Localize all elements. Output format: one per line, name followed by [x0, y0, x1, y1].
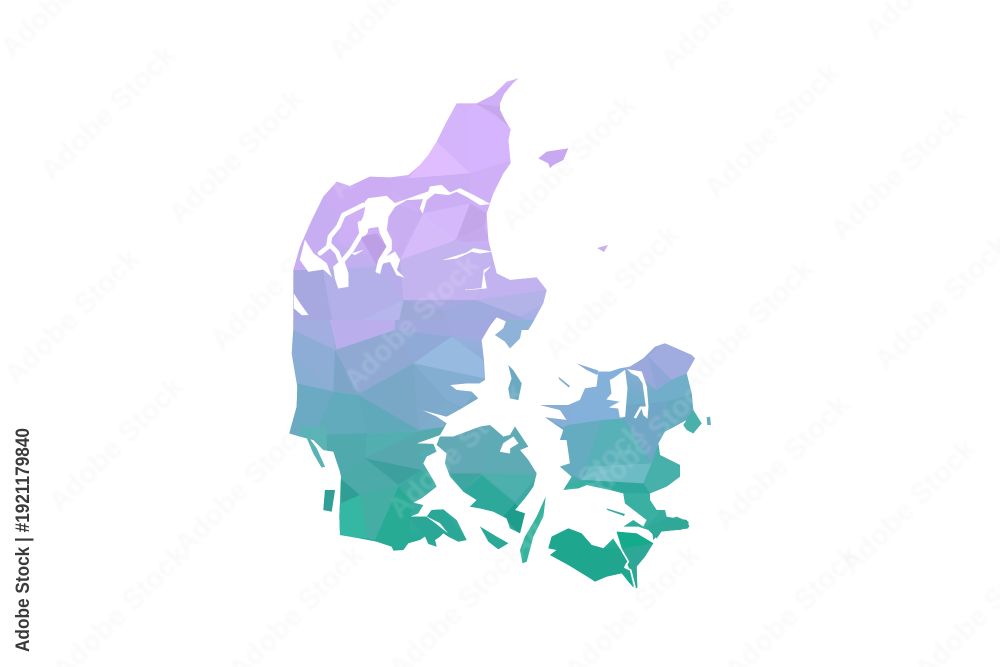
watermark: repeated Adobe Stock pattern: Adobe Stock: [0, 242, 147, 391]
watermark: repeated Adobe Stock pattern: Adobe Stock: [162, 82, 311, 231]
watermark: Adobe Stock over the map: Adobe Stock: [572, 366, 721, 515]
watermark: Adobe Stock over the map: Adobe Stock: [502, 416, 651, 565]
fjord: Limfjord: [294, 185, 492, 315]
watermark: repeated Adobe Stock pattern: Adobe Stock: [708, 388, 857, 537]
infographic: low-poly map of Denmark: [15, 78, 852, 652]
facets: southern Jutland: [287, 320, 547, 565]
watermark: repeated Adobe Stock pattern: Adobe Stock: [494, 88, 643, 237]
watermark: Adobe Stock over the map: [322, 56, 721, 565]
fjord: Als Sund and Odense Fjord: [427, 437, 518, 533]
watermark: repeated Adobe Stock pattern: Adobe Stock: [538, 218, 687, 367]
watermark: Adobe Stock over the map: Adobe Stock: [337, 248, 486, 397]
watermark: repeated Adobe Stock pattern: Adobe Stock: [204, 208, 353, 357]
watermark: repeated Adobe Stock pattern: Adobe Stock: [834, 432, 983, 581]
watermark: Adobe Stock over the map: Adobe Stock: [322, 56, 471, 205]
map: Denmark low-poly landmass: [280, 70, 720, 600]
watermark: repeated Adobe Stock pattern: Adobe Stock: [824, 98, 973, 247]
watermark: repeated Adobe Stock pattern: Adobe Stock: [42, 370, 191, 519]
fjord: Isefjord and Roskilde Fjord: [607, 369, 648, 587]
facets: Zealand and southern islands: [538, 342, 703, 590]
watermark: repeated Adobe Stock pattern: Adobe Stock: [34, 38, 183, 187]
watermark: Adobe Stock over the map: Adobe Stock: [382, 376, 531, 525]
watermark: repeated Adobe Stock pattern: Adobe Stock: [168, 412, 317, 561]
fjords: white inlets cut into the land: [294, 185, 648, 587]
watermark: repeated Adobe Stock pattern: Adobe Stock: [672, 252, 821, 401]
stock id label: Adobe Stock | #1921179840: [13, 428, 34, 652]
facets: northern Jutland: [293, 77, 568, 333]
watermark: repeated Adobe Stock pattern: Adobe Stock: [698, 56, 847, 205]
